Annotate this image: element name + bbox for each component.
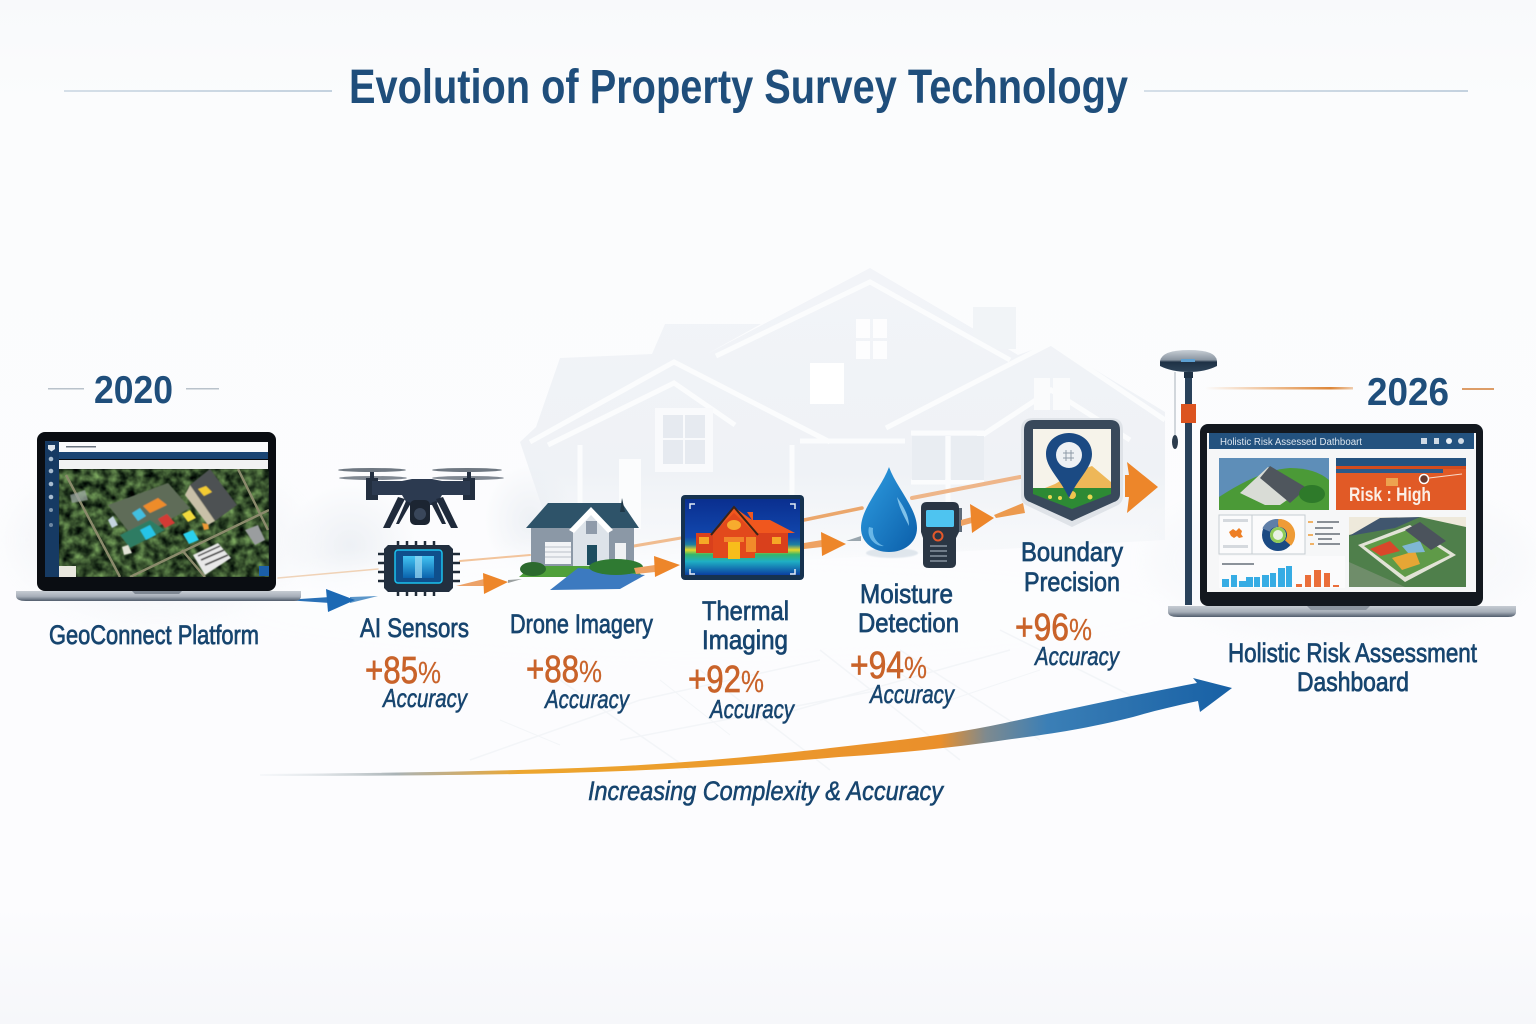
title rule right — [1144, 90, 1468, 92]
metric block: Thermal Imaging: Accuracy — [708, 694, 796, 724]
metric block: Drone Imagery: +88 — [526, 649, 579, 691]
dashboard image: site plan — [1349, 517, 1466, 587]
metric block: Moisture Detection: Moisture — [860, 579, 953, 609]
metric block: Thermal Imaging: +92 — [688, 659, 741, 701]
metric block: Thermal Imaging: % — [741, 664, 764, 699]
watermark: fading mist behind icons — [220, 465, 1180, 665]
title text: Evolution of Property Survey Technology — [349, 61, 1128, 114]
laptop: GeoConnect — [13, 432, 303, 615]
dashboard bar charts — [1219, 556, 1345, 588]
laptop base — [16, 591, 301, 601]
metric block: Moisture Detection: +94 — [850, 645, 904, 687]
metric block: Drone Imagery: Drone Imagery — [510, 609, 653, 639]
metric block: Boundary Precision: +96 — [1015, 607, 1069, 649]
metric block: Drone Imagery — [510, 609, 653, 714]
icon: thermal imaging tablet — [681, 495, 804, 580]
icon: moisture meter — [921, 502, 962, 568]
label: GeoConnect Platform: GeoConnect Platform — [49, 620, 259, 650]
arrow: drone imagery to thermal — [634, 556, 680, 577]
metric block: Thermal Imaging: Thermal — [702, 596, 789, 626]
caption: increasing complexity: Increasing Complexity & Accuracy — [588, 776, 944, 806]
metric block: AI Sensors — [360, 613, 469, 713]
dashboard header — [1209, 433, 1474, 449]
icon: AI sensor chip — [378, 541, 460, 596]
metric block: Boundary Precision: Boundary — [1021, 537, 1123, 567]
arrow: platform to AI sensors — [285, 589, 378, 612]
metric block: Boundary Precision: Accuracy — [1033, 641, 1121, 671]
year 2026: 2026 — [1367, 371, 1449, 414]
label: Holistic Risk Assessment Dashboard: Dashboard — [1297, 667, 1409, 697]
dashboard card: heat widget and donut — [1219, 515, 1305, 554]
metric block: AI Sensors: +85 — [365, 650, 418, 692]
icon: water drop — [861, 467, 918, 558]
metric block: Drone Imagery: % — [579, 654, 602, 689]
icon: house for drone imagery — [519, 498, 645, 590]
dashboard header: Holistic Risk Assessed Dathboart — [1220, 437, 1362, 448]
metric block: Thermal Imaging — [688, 596, 796, 724]
watermark: faint street map — [470, 630, 1160, 770]
arrow: moisture to boundary — [961, 503, 1025, 533]
metric block: Moisture Detection: Accuracy — [868, 679, 956, 709]
metric block: Moisture Detection — [850, 579, 959, 709]
arrow: thermal to moisture — [804, 532, 861, 556]
laptop base — [1168, 606, 1516, 617]
label: Holistic Risk Assessment Dashboard — [1228, 638, 1477, 697]
metric block: Moisture Detection: Detection — [858, 608, 959, 638]
metric block: AI Sensors: AI Sensors — [360, 613, 469, 643]
watermark: house silhouette — [520, 268, 1165, 560]
icon: GPS survey pole — [1160, 350, 1217, 605]
metric block: Thermal Imaging: Imaging — [702, 625, 788, 655]
dashboard card: risk high: Risk : High — [1349, 485, 1431, 506]
metric block: Moisture Detection: % — [904, 650, 927, 685]
label: Holistic Risk Assessment Dashboard: Holistic Risk Assessment — [1228, 638, 1477, 668]
icon: boundary location shield — [1021, 418, 1123, 527]
year 2020: 2020 — [94, 369, 173, 412]
satellite map — [59, 469, 269, 577]
arrow: increasing complexity curve — [260, 678, 1232, 776]
metric block: Boundary Precision: % — [1069, 612, 1092, 647]
icon: drone — [338, 468, 504, 528]
laptop: risk dashboard — [1168, 424, 1516, 617]
metric block: AI Sensors: % — [418, 655, 441, 690]
metric block: Drone Imagery: Accuracy — [543, 684, 631, 714]
dashboard image: house model — [1219, 458, 1329, 510]
arrow: boundary to dashboard — [1125, 462, 1158, 513]
sidebar — [45, 441, 59, 577]
browser bars — [59, 442, 268, 469]
arrow: AI sensors to drone imagery — [456, 573, 522, 594]
metric block: AI Sensors: Accuracy — [381, 683, 469, 713]
connector: thin progression lines — [278, 477, 1020, 578]
title rule left — [64, 90, 332, 92]
metric block: Boundary Precision — [1015, 537, 1123, 671]
dashboard list — [1308, 522, 1340, 544]
metric block: Boundary Precision: Precision — [1024, 567, 1120, 597]
dashboard card: risk high — [1336, 458, 1466, 510]
